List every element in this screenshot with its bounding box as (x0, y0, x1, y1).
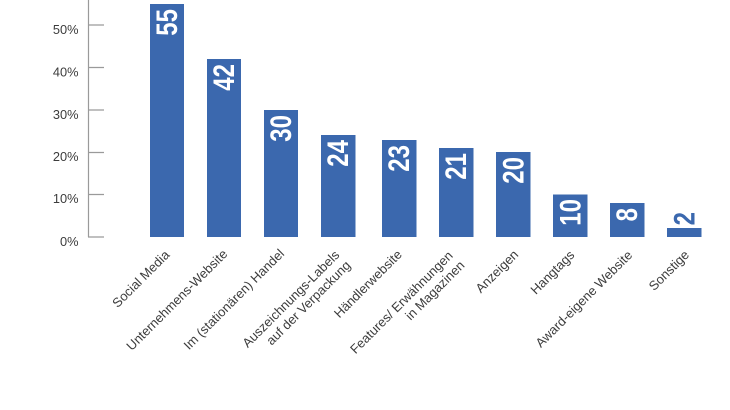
bar: Händlerwebsite 23: 23 (381, 145, 416, 172)
category labels: Hangtags (527, 247, 578, 297)
y axis: 30% (53, 107, 78, 122)
category labels: in Magazinen (402, 258, 467, 323)
bar: Sonstige 2 (667, 212, 702, 237)
bar: Hangtags 10: 10 (553, 199, 587, 226)
category labels: Unternehmens-Website (123, 246, 230, 353)
bar: Unternehmens-Website 42: 42 (206, 64, 241, 91)
bar: Social Media 55 (149, 4, 184, 237)
bar: Handel 30: 30 (263, 115, 298, 142)
category labels: Social Media (109, 247, 173, 310)
category labels: Auszeichnungs-Labels (239, 247, 343, 350)
category labels: Features/ Erwähnungen (347, 248, 456, 357)
bar: Händlerwebsite 23 (381, 140, 416, 237)
y axis (53, 0, 104, 249)
category labels: auf der Verpackung (263, 258, 353, 348)
category labels: Award-eigene Website (532, 247, 635, 350)
bar: Award-eigene Website 8 (609, 203, 644, 237)
bar: Hangtags 10 (553, 194, 588, 237)
category labels: Im (stationären) Handel (180, 246, 287, 353)
category labels: Händlerwebsite (331, 247, 405, 321)
y axis: 10% (53, 191, 78, 206)
y axis: 50% (53, 22, 78, 37)
y axis: 0% (60, 234, 78, 249)
bar: Handel 30 (263, 110, 298, 237)
bar: Features 21: 21 (438, 153, 473, 180)
bar: Social Media 55: 55 (149, 9, 184, 36)
bar: Anzeigen 20: 20 (496, 157, 530, 184)
bar: Sonstige 2: 2 (667, 212, 701, 225)
category labels (109, 246, 692, 357)
bar: Anzeigen 20 (496, 152, 530, 237)
y axis: 20% (53, 149, 78, 164)
category labels: Anzeigen (472, 247, 521, 296)
y axis: 40% (53, 64, 78, 80)
bar: Auszeichnungs-Labels 24 (320, 135, 356, 237)
bar: Unternehmens-Website 42 (206, 59, 241, 237)
bar: Auszeichnungs-Labels 24: 24 (320, 140, 355, 167)
category labels: Sonstige (646, 247, 692, 294)
bar: Award-eigene Website 8: 8 (609, 208, 644, 221)
bar: Features 21 (438, 148, 474, 237)
